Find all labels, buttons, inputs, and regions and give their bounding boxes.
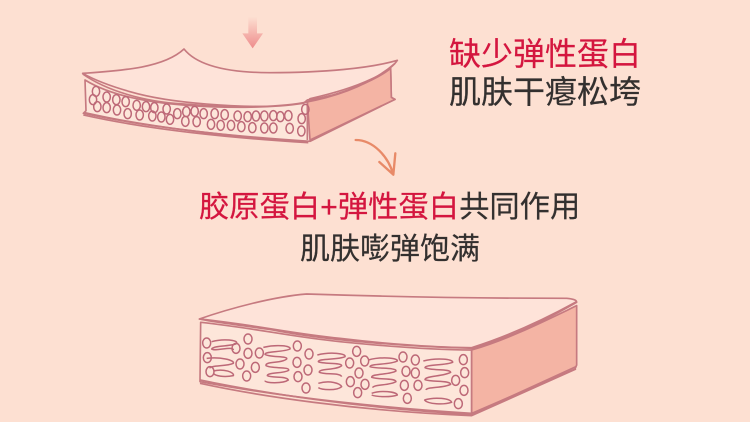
elastin springs and collagen cells [203, 334, 469, 409]
icon: pink down arrow [242, 17, 263, 48]
heading: lacking elastin: 缺少弹性蛋白 [449, 36, 641, 72]
text: skin plump: 肌肤嘭弹饱满 [300, 233, 480, 266]
icon: orange curved arrow [356, 140, 395, 175]
illustration: plump skin block [199, 294, 577, 416]
illustration: skin block lacking elastin [83, 49, 397, 143]
collagen cells [89, 86, 309, 136]
text: skin dry and sagging: 肌肤干瘪松垮 [449, 74, 641, 110]
heading: collagen and elastin work together: 胶原蛋白+弹性蛋白共同作用 [199, 191, 580, 224]
